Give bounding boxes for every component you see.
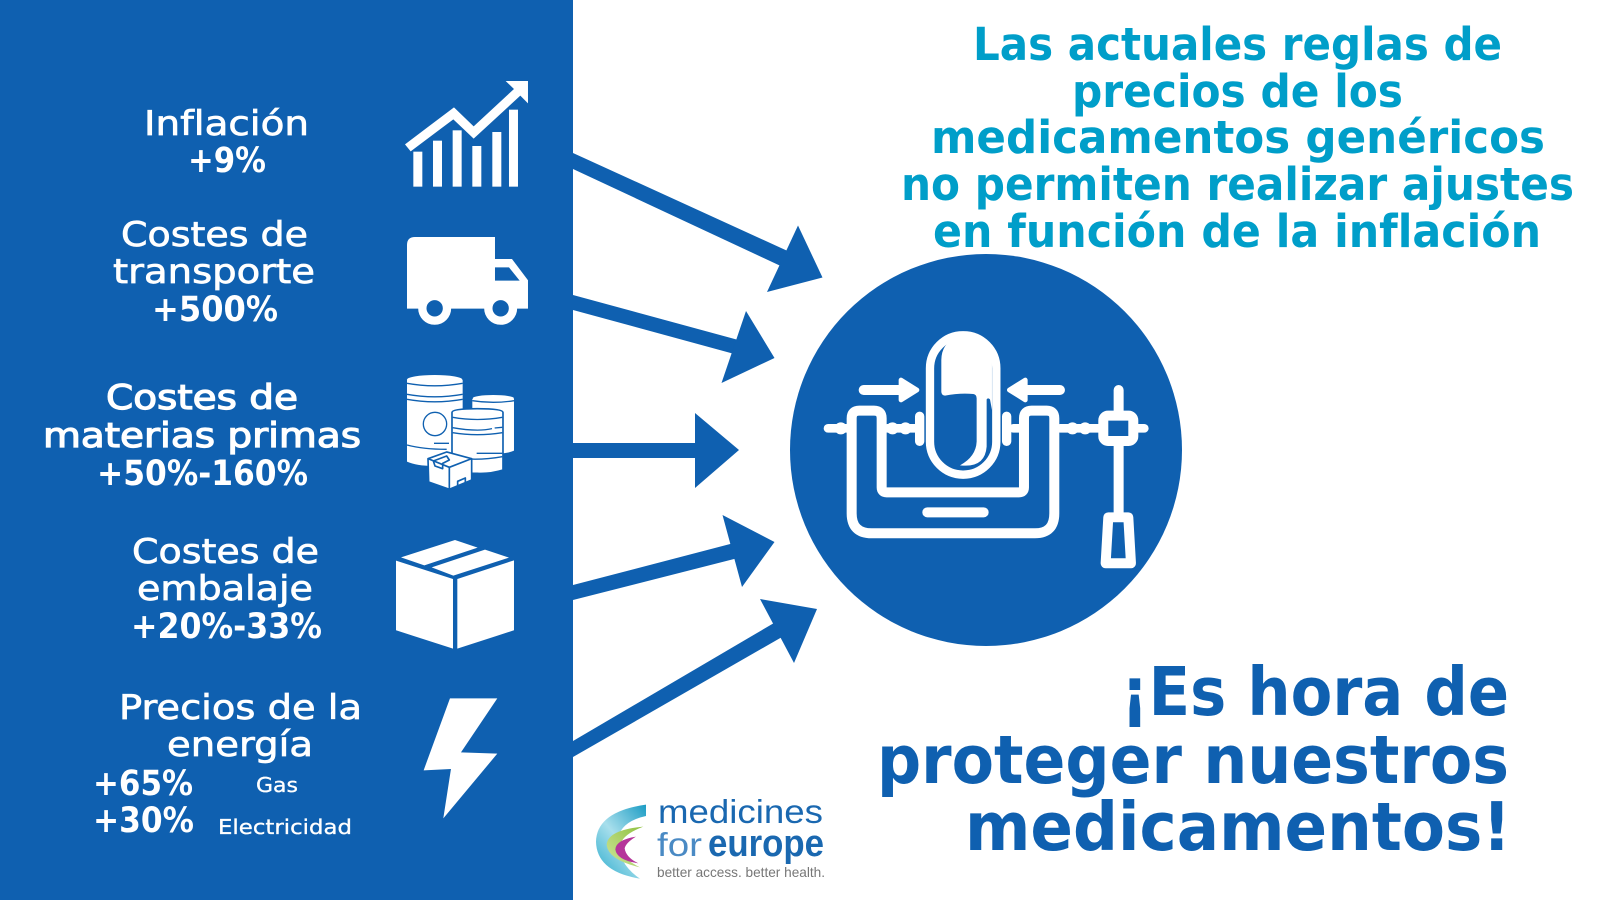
text: raw material costs: +50%-160% bbox=[97, 454, 308, 494]
text: energy prices: +65% bbox=[93, 764, 193, 804]
call to action: medicamentos! bbox=[965, 788, 1511, 866]
arrow: raw materials to medicine bbox=[573, 413, 739, 488]
text: energy prices: +30% bbox=[93, 801, 194, 841]
title: pricing rules: en función de la inflación bbox=[933, 205, 1541, 258]
text: transport costs bbox=[113, 215, 315, 330]
text: transport costs: transporte bbox=[113, 252, 315, 292]
logo: medicines for europe: better access. better health. bbox=[657, 864, 825, 880]
arrow: packaging to medicine bbox=[573, 515, 774, 600]
text: raw material costs bbox=[43, 378, 361, 494]
logo mark bbox=[596, 805, 646, 879]
title: pricing rules bbox=[901, 18, 1574, 258]
text: transport costs: +500% bbox=[152, 290, 278, 330]
icon: drums and box bbox=[407, 375, 514, 489]
logo: medicines for europe: for bbox=[657, 826, 702, 863]
circle: squeezed medicine bbox=[790, 254, 1182, 646]
text: inflation: Inflación bbox=[144, 104, 309, 144]
screw and handle bbox=[828, 390, 1144, 563]
arrow: transport to medicine bbox=[573, 295, 774, 383]
text: inflation bbox=[144, 104, 309, 181]
clamp frame bbox=[852, 411, 1054, 533]
arrow: energy to medicine bbox=[573, 599, 817, 757]
text: raw material costs: Costes de bbox=[106, 378, 298, 418]
text: energy prices: Gas bbox=[256, 773, 298, 797]
logo: medicines for europe: medicines bbox=[658, 793, 823, 830]
title: pricing rules: no permiten realizar ajustes bbox=[901, 158, 1574, 211]
text: energy prices: energía bbox=[167, 725, 313, 765]
title: pricing rules: precios de los bbox=[1072, 65, 1403, 118]
arrow: inflation to medicine bbox=[573, 153, 822, 292]
title: pricing rules: Las actuales reglas de bbox=[973, 18, 1502, 71]
text: transport costs: Costes de bbox=[121, 215, 308, 255]
panel: cost factors bbox=[0, 0, 573, 900]
pressure arrows bbox=[864, 380, 1060, 400]
icon: cardboard box bbox=[396, 540, 514, 649]
clamp base bar bbox=[922, 507, 989, 517]
text: raw material costs: materias primas bbox=[43, 416, 361, 456]
call to action bbox=[877, 653, 1511, 866]
logo: medicines for europe bbox=[596, 793, 825, 880]
text: energy prices bbox=[93, 688, 362, 841]
text: packaging costs: embalaje bbox=[137, 569, 313, 609]
text: energy prices: Precios de la bbox=[119, 688, 362, 728]
call to action: ¡Es hora de bbox=[1121, 653, 1509, 731]
text: inflation: +9% bbox=[188, 141, 266, 181]
call to action: proteger nuestros bbox=[877, 721, 1509, 799]
icon: capsule in clamp bbox=[828, 335, 1144, 563]
text: packaging costs bbox=[131, 532, 322, 647]
text: packaging costs: Costes de bbox=[132, 532, 319, 572]
logo: medicines for europe: europe bbox=[708, 823, 824, 865]
text: packaging costs: +20%-33% bbox=[131, 607, 322, 647]
text: energy prices: Electricidad bbox=[218, 815, 352, 839]
icon: truck bbox=[407, 237, 528, 321]
title: pricing rules: medicamentos genéricos bbox=[931, 111, 1545, 164]
capsule bbox=[930, 335, 996, 475]
icon: rising chart bbox=[405, 81, 528, 187]
icon: lightning bolt bbox=[424, 698, 497, 818]
